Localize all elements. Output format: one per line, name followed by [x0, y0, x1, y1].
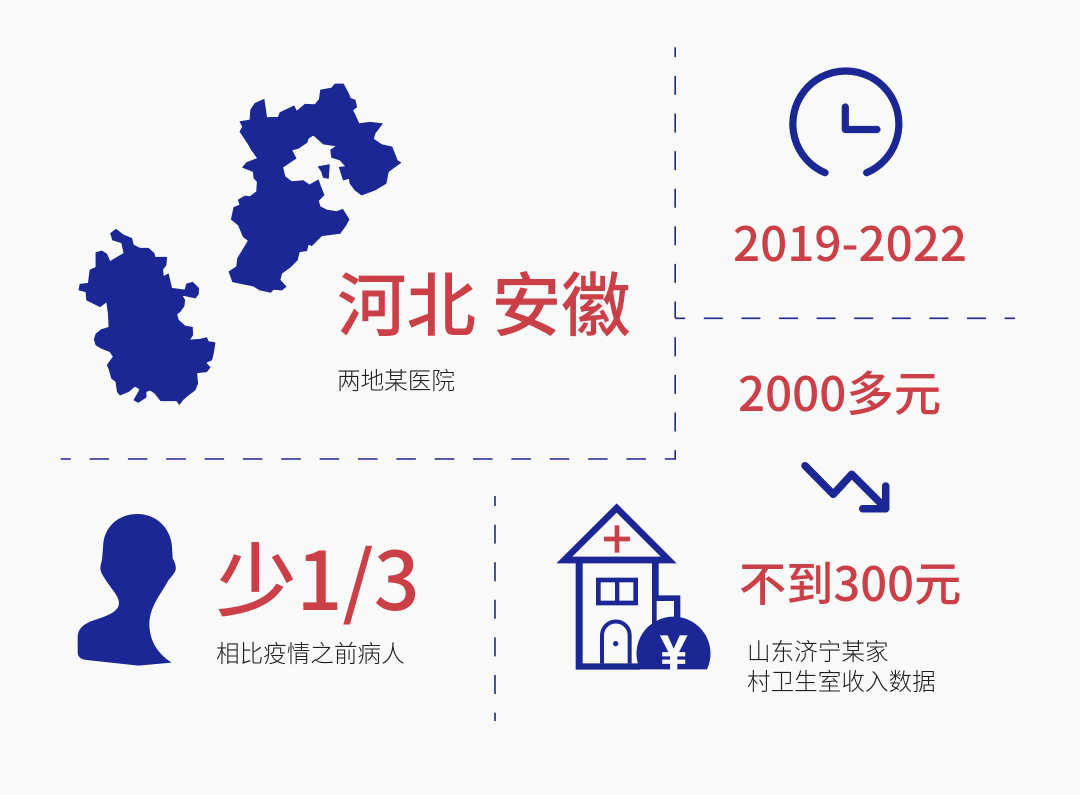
icon: person silhouette: [78, 514, 176, 666]
text: data source: 村卫生室收入数据: [747, 663, 936, 697]
icon: clock: [793, 71, 899, 173]
text: compared with before the pandemic: 相比疫情之前病人: [216, 635, 405, 669]
text: data source: [747, 633, 936, 697]
text: year range: 2019-2022: [733, 206, 967, 275]
text: patient decrease: 少1/3: [216, 518, 420, 634]
icon: falling arrow: [805, 466, 886, 509]
text: two hospitals: 两地某医院: [337, 362, 455, 396]
heading: provinces: 河北 安徽: [337, 250, 631, 351]
text: income after: 不到300元: [739, 546, 961, 615]
icon: map of Hebei: [229, 84, 401, 292]
icon: clinic with yen coin: ¥: [660, 627, 687, 680]
text: income before: 2000多元: [738, 356, 941, 425]
text: data source: 山东济宁某家: [747, 633, 889, 667]
icon: map of Anhui: [79, 229, 215, 404]
icon: clinic with yen coin: [556, 503, 710, 680]
